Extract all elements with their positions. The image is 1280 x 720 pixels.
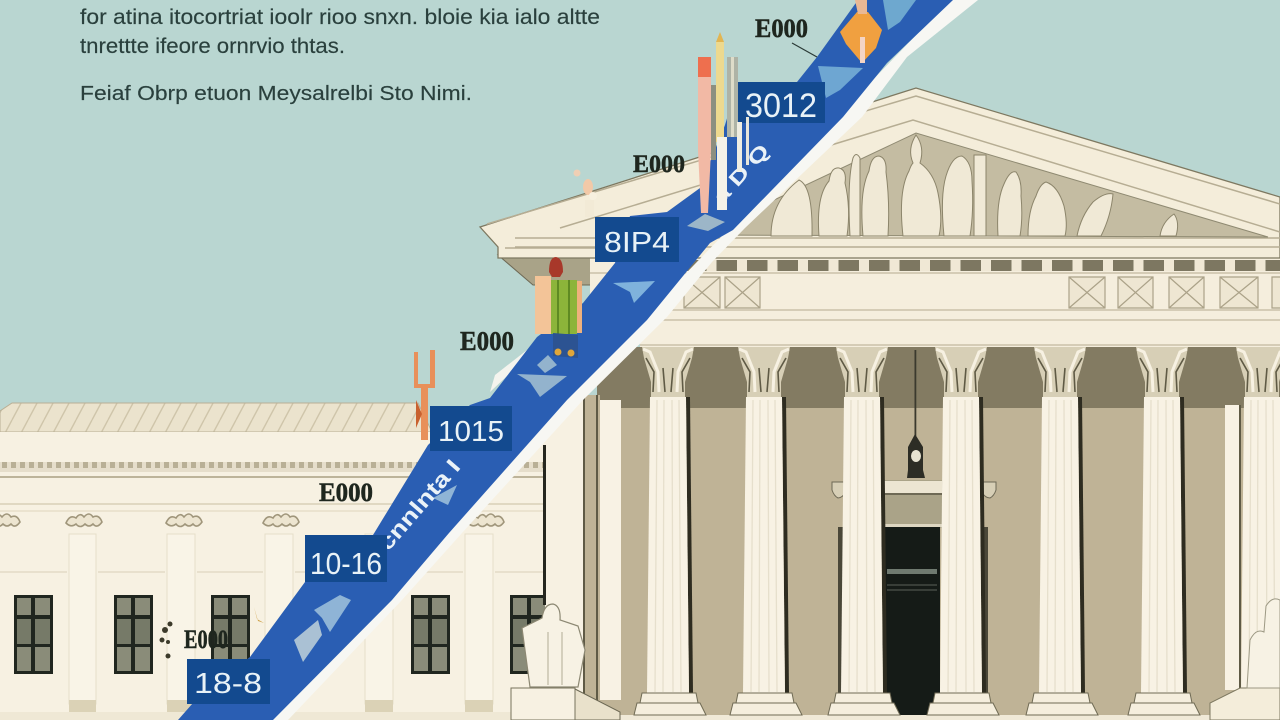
ribbon small text: a D Q <box>709 140 774 208</box>
windows <box>14 595 549 674</box>
year label 3 <box>430 406 512 451</box>
tympanum with sculptures <box>700 133 1268 237</box>
icon: small ornament near caption <box>160 607 264 658</box>
blue timeline ribbon <box>178 0 953 720</box>
columns <box>634 347 1280 715</box>
leader line <box>792 43 817 57</box>
bottom steps <box>575 688 1280 720</box>
doorway <box>832 480 996 715</box>
dark year captions: E000 <box>755 14 808 43</box>
year label 2 <box>305 535 387 582</box>
dark year captions <box>184 14 808 654</box>
year label 5: 3012 <box>745 87 817 125</box>
dark year captions: E000 <box>184 625 228 654</box>
side wall piers <box>543 395 1241 720</box>
colonnade wall <box>597 347 1280 715</box>
year label 2: 10-16 <box>310 546 382 581</box>
ribbon decorative pale shapes <box>294 0 916 662</box>
white left fringe <box>490 332 550 392</box>
cornice shadow under pediment <box>498 255 600 285</box>
left building roof <box>0 403 432 432</box>
statue left <box>511 604 585 720</box>
rosettes <box>0 514 504 526</box>
year label 4: 8IP4 <box>604 227 670 259</box>
text block: intro paragraph: for atina itocortriat ioolr rioo snxn. bloie kia ialo altte <box>80 6 600 29</box>
temple building <box>480 88 1280 720</box>
ribbon small text: cnnlnta I <box>373 454 465 555</box>
icon: green book bundle <box>535 257 582 358</box>
year label 1 <box>187 659 270 704</box>
left building wall <box>0 432 546 720</box>
year label 4 <box>595 217 679 262</box>
text block: intro paragraph: Feiaf Obrp etuon Meysalrelbi Sto Nimi. <box>80 83 472 105</box>
white torn edge of ribbon <box>262 0 978 720</box>
year label 1: 18-8 <box>194 668 262 700</box>
dark year captions: E000 <box>319 478 373 507</box>
pediment moulding lines <box>487 96 1280 248</box>
hanging lamp <box>907 350 925 478</box>
colonnade upper shadow <box>597 347 1280 408</box>
icon: small figure <box>574 170 597 217</box>
text block: intro paragraph: tnrettte ifeore ornrvio thtas. <box>80 35 345 58</box>
statue right <box>1247 599 1280 688</box>
pediment <box>480 88 1280 258</box>
dark year captions: E000 <box>633 151 685 178</box>
ribbon small text <box>373 140 774 555</box>
left building <box>0 403 549 720</box>
year label 3: 1015 <box>438 416 504 448</box>
dark year captions: E000 <box>460 326 514 356</box>
entablature <box>590 258 1280 347</box>
icon: pencils <box>698 32 749 213</box>
icon: orange figure <box>840 0 882 63</box>
text block: intro paragraph <box>80 6 600 105</box>
icon: fork cluster <box>414 350 435 440</box>
colonnade floor <box>545 715 1280 720</box>
